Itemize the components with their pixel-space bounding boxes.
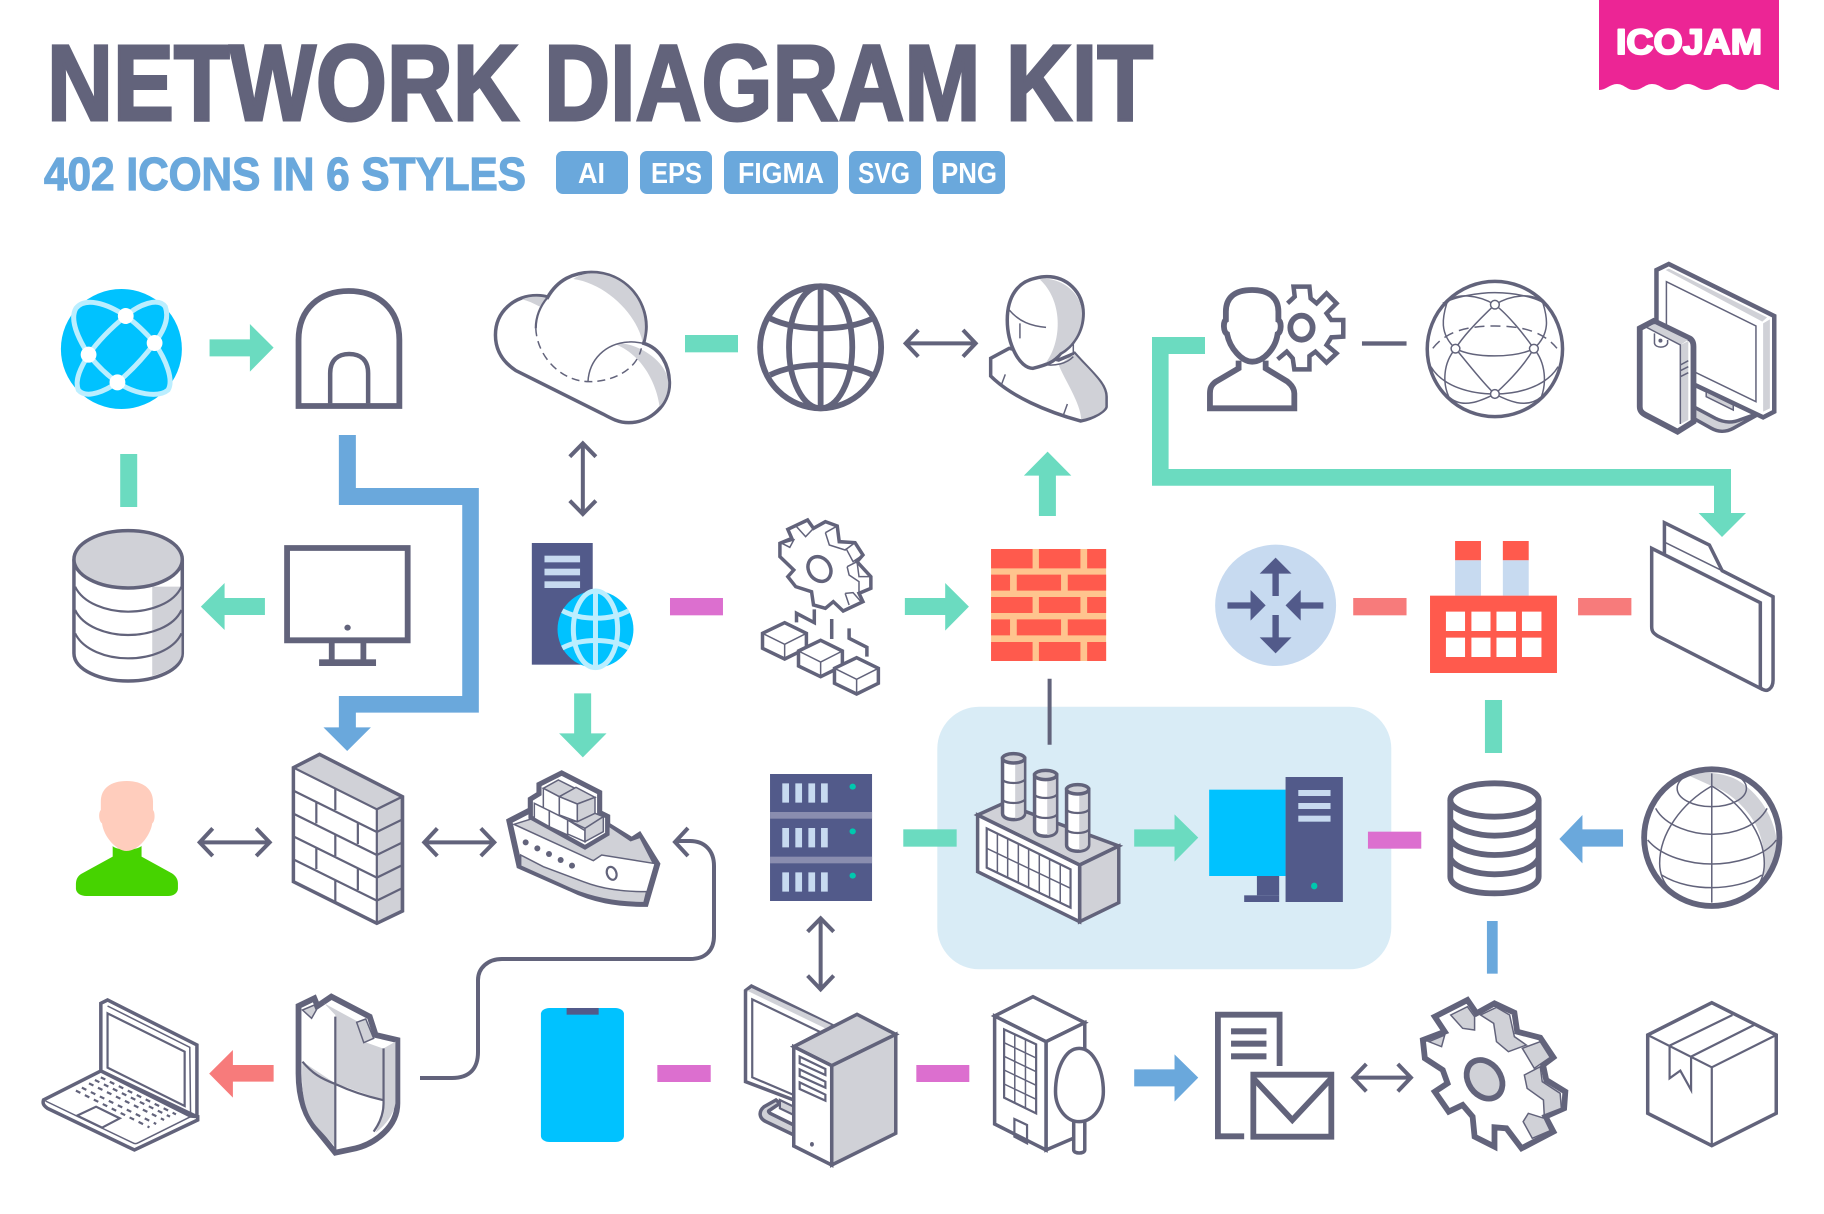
arrow: building to mail bbox=[1134, 1054, 1198, 1102]
connector bar: database to gear bbox=[1487, 921, 1498, 974]
icon: network globe bbox=[61, 289, 182, 409]
icon: monitor bbox=[287, 548, 408, 666]
icon: user with gear bbox=[1210, 287, 1343, 408]
icon: cloud bbox=[495, 272, 669, 423]
icon: flat phone bbox=[541, 1008, 624, 1142]
icon: package box bbox=[1648, 1003, 1776, 1146]
connector bar: phone to computer bbox=[657, 1065, 711, 1082]
icon: wire globe bbox=[760, 286, 881, 408]
double arrow: wall to ship bbox=[424, 828, 494, 856]
icon: flat PC bbox=[1209, 777, 1343, 902]
icon: flat firewall bricks bbox=[991, 549, 1106, 661]
icon: network sphere bbox=[1427, 281, 1563, 417]
icon: laptop bbox=[43, 1000, 198, 1150]
logo: icojam badge bbox=[1599, 0, 1779, 90]
connector: curved line shield to ship bbox=[420, 828, 714, 1078]
icon: web server bbox=[532, 543, 633, 668]
arrow: firewall to person bbox=[1024, 452, 1071, 516]
double arrow: mail to gear bbox=[1353, 1064, 1411, 1091]
icon: shaded globe bbox=[1644, 769, 1779, 906]
arrow: monitor to database bbox=[201, 583, 265, 630]
icon: isometric gear bbox=[1423, 1000, 1565, 1148]
icon: flat person bbox=[76, 781, 178, 896]
double arrow: person to wall bbox=[200, 828, 270, 856]
connector bar: cloud to globe bbox=[685, 335, 738, 352]
icon: folder bbox=[1652, 523, 1773, 690]
connector bar: server to gear bbox=[670, 598, 723, 615]
tag: PNG: PNG bbox=[941, 158, 997, 190]
icon: rack server bbox=[770, 774, 872, 901]
tag: FIGMA bbox=[724, 151, 838, 194]
connector: blue elbow arrow to wall bbox=[323, 435, 479, 751]
icon: ship bbox=[509, 773, 657, 904]
double arrow: globe to person bbox=[906, 330, 976, 357]
tag: SVG: SVG bbox=[858, 158, 910, 190]
icon: database outline bbox=[1450, 783, 1539, 893]
connector bar: factory to folder bbox=[1578, 598, 1631, 615]
connector bar: PC to database bbox=[1368, 832, 1421, 849]
icon: database shaded bbox=[74, 531, 182, 681]
connector bar: globe to database bbox=[120, 454, 137, 507]
connector: mint elbow arrow to folder bbox=[1152, 337, 1746, 537]
connector bar: computer to building bbox=[916, 1065, 969, 1082]
connector bar: user to globe bbox=[1362, 341, 1407, 346]
icon: isometric wall bbox=[293, 754, 403, 923]
icon: isometric factory bbox=[978, 754, 1119, 922]
title: NETWORK DIAGRAM KIT bbox=[47, 22, 1153, 143]
icon: isometric computer bbox=[746, 986, 896, 1165]
icon: router bbox=[1215, 545, 1336, 666]
panel: highlighted zone bbox=[937, 707, 1391, 969]
connector bar: router to factory bbox=[1353, 598, 1407, 615]
icon: isometric person bbox=[991, 277, 1106, 421]
icon: monitor and phone bbox=[1640, 264, 1774, 432]
tag: EPS: EPS bbox=[651, 158, 702, 190]
icon: building with tree bbox=[995, 997, 1103, 1153]
arrow: globe to database bbox=[1559, 815, 1623, 863]
arrow: server to ship bbox=[559, 693, 607, 757]
icon: tunnel bbox=[299, 291, 399, 406]
connector bar: factory to database bbox=[1485, 700, 1502, 753]
tag: FIGMA: FIGMA bbox=[738, 158, 824, 190]
arrow: globe to tunnel bbox=[210, 324, 274, 372]
format tags bbox=[556, 151, 1005, 194]
tag: SVG bbox=[849, 151, 921, 194]
tag: AI bbox=[556, 151, 628, 194]
logo: icojam badge: ICOJAM bbox=[1616, 23, 1762, 62]
double arrow: cloud to server bbox=[570, 443, 596, 514]
arrow: coral to laptop bbox=[209, 1050, 274, 1098]
icon: document and envelope bbox=[1218, 1015, 1331, 1137]
subtitle: 402 ICONS IN 6 STYLES bbox=[44, 148, 526, 200]
arrow: gear to firewall bbox=[905, 583, 969, 631]
connector bar: rack to factory bbox=[903, 829, 957, 847]
tag: PNG bbox=[933, 151, 1005, 194]
tag: EPS bbox=[640, 151, 712, 194]
icon: flat factory bbox=[1430, 541, 1557, 673]
double arrow: rack to computer bbox=[808, 918, 834, 989]
icon: shield bbox=[299, 997, 397, 1153]
icon: gear with blocks bbox=[763, 520, 878, 694]
connector: thin line firewall to factory bbox=[1048, 679, 1052, 745]
tag: AI: AI bbox=[578, 158, 605, 190]
arrow: factory to PC bbox=[1134, 814, 1198, 862]
